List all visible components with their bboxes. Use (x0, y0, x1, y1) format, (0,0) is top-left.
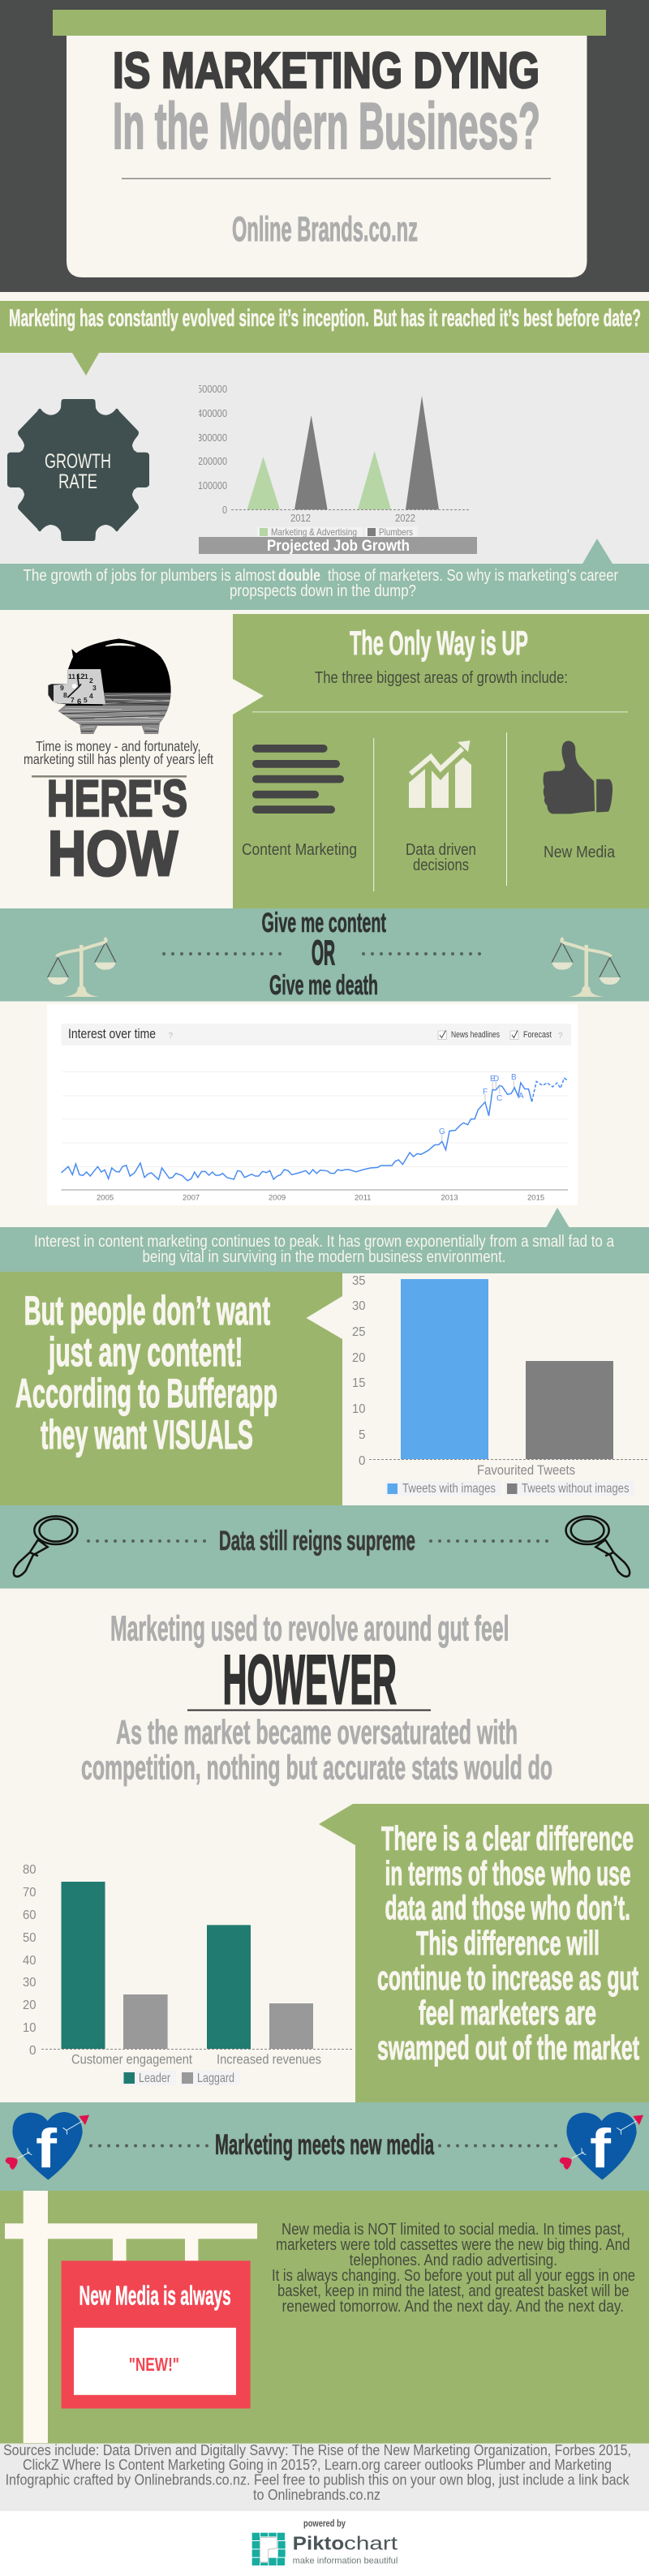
event markers: B (511, 1073, 517, 1082)
callout: plumbers vs marketers: double (278, 567, 320, 585)
icon: facebook heart left: f (36, 2118, 57, 2179)
section banner: marketing meets new media (0, 2102, 649, 2191)
sign board (62, 2260, 251, 2409)
category labels: Customer engagement (71, 2052, 192, 2067)
chart legend (257, 526, 418, 538)
legend: Tweets without images (522, 1482, 630, 1496)
callout: plumbers vs marketers: The growth of jobs for plumbers is almost (23, 567, 276, 585)
event markers: F (483, 1088, 488, 1097)
heading lines (261, 908, 386, 1001)
y axis labels: 80 (23, 1863, 37, 1877)
panel: people want visuals: just any content! (48, 1329, 243, 1375)
y axis labels (23, 1863, 37, 2058)
bars (62, 1882, 313, 2049)
y axis labels: 30 (352, 1299, 366, 1313)
icon: rising bar chart (409, 741, 471, 808)
subheading: The three biggest areas of growth include: (315, 669, 568, 687)
clock face numbers: 2 (89, 676, 93, 685)
heading lines: OR (312, 934, 335, 972)
chart: google trends interest over time (47, 1004, 578, 1205)
panel: title header (0, 0, 649, 292)
text block: however: HOWEVER (222, 1642, 397, 1719)
label: data driven decisions: Data driven (406, 841, 476, 859)
clock face numbers: 4 (89, 692, 93, 700)
clock face numbers: 6 (77, 698, 81, 706)
heading: here's how: HOW (48, 818, 178, 889)
triangle bars (247, 396, 439, 509)
y axis labels: 500000 (197, 383, 227, 395)
heading: here's how: HERE'S (47, 771, 187, 827)
panel: here's how (24, 633, 213, 889)
y axis labels: 10 (352, 1402, 366, 1416)
trend line (62, 1078, 568, 1181)
icon: magnifying glass left (14, 1516, 77, 1577)
footer: powered by piktochart: powered by (303, 2519, 346, 2529)
x axis years: 2011 (355, 1194, 371, 1202)
sign board: New Media is always (80, 2281, 231, 2311)
label: data driven decisions: decisions (413, 857, 469, 874)
chart header strip: Forecast (523, 1030, 552, 1040)
y axis labels: 50 (23, 1931, 37, 1945)
chart legend: Marketing & Advertising (271, 526, 357, 538)
y axis labels: 40 (23, 1954, 37, 1968)
bar: tweets without images (526, 1361, 613, 1459)
heading: here's how (47, 771, 187, 889)
event markers: G (439, 1127, 445, 1136)
callout: plumbers vs marketers (0, 564, 649, 610)
legend (385, 1481, 635, 1496)
piktochart wordmark: chart (344, 2532, 398, 2553)
panel: people want visuals: But people don’t want (24, 1288, 270, 1333)
clock face numbers: 5 (84, 696, 88, 704)
icon: thumbs up (543, 741, 612, 814)
panel: people want visuals: According to Bufferapp (15, 1371, 277, 1416)
y axis labels: 35 (352, 1274, 366, 1288)
x axis years: 2005 (97, 1194, 114, 1202)
callout pointer (582, 539, 612, 564)
x axis labels: 2022 (395, 512, 415, 524)
y axis labels: 0 (29, 2044, 37, 2058)
chart title bar: Projected Job Growth (267, 538, 410, 555)
clock face numbers: 3 (92, 684, 97, 692)
heading: Data still reigns supreme (219, 1526, 415, 1556)
y axis labels: 300000 (197, 431, 227, 444)
y axis labels: 30 (23, 1976, 37, 1990)
icon: gear with growth rate label: RATE (58, 470, 97, 493)
legend: Tweets with images (402, 1482, 496, 1496)
icon: piggy bank clock photo (48, 638, 171, 734)
piktochart wordmark (293, 2532, 398, 2566)
text block: new media description (272, 2221, 635, 2316)
sign board: "NEW!" (129, 2354, 179, 2375)
legend: Leader (139, 2072, 171, 2085)
y axis labels: 0 (222, 504, 227, 516)
icon: facebook heart left (6, 2112, 89, 2180)
green card cap (53, 10, 606, 36)
x axis years: 2013 (441, 1194, 458, 1202)
heading lines: Give me content (261, 908, 386, 938)
y axis labels: 20 (23, 1999, 37, 2012)
panel: new media (0, 2191, 649, 2444)
category labels: Increased revenues (217, 2052, 321, 2067)
chart header strip (62, 1024, 571, 1045)
brand name: Online Brands.co.nz (232, 210, 418, 249)
event markers: A (518, 1092, 524, 1101)
caption: time is money (24, 738, 213, 767)
y axis labels: 5 (359, 1428, 366, 1442)
y axis labels: 10 (23, 2021, 37, 2035)
y axis labels (352, 1274, 366, 1468)
label: data driven decisions (406, 841, 476, 874)
x axis labels (290, 512, 415, 524)
callout: content marketing interest: being vital in surviving in the modern business environment. (143, 1248, 506, 1266)
text block: however (81, 1609, 552, 1786)
title line 1: IS MARKETING DYING (113, 43, 539, 99)
event markers: D (493, 1075, 499, 1084)
intro banner (0, 301, 649, 353)
caption: time is money: Time is money - and fortunately, (36, 738, 201, 754)
caption: time is money: marketing still has plenty of years left (24, 751, 213, 767)
chart: leader vs laggard (23, 1863, 353, 2085)
chart legend: Plumbers (379, 526, 413, 538)
panel: people want visuals: they want VISUALS (41, 1412, 253, 1458)
y axis labels: 70 (23, 1886, 37, 1900)
panel: people want visuals (0, 1272, 342, 1505)
banner pointer (72, 353, 99, 376)
icon: gear with growth rate label: GROWTH (45, 450, 111, 473)
x axis label: Favourited Tweets (477, 1462, 575, 1478)
label: content marketing: Content Marketing (242, 841, 357, 859)
panel: clear difference (319, 1804, 649, 2102)
clock face numbers (60, 672, 97, 706)
clock face numbers: 7 (71, 696, 75, 704)
y axis labels: 25 (352, 1325, 366, 1339)
icon: scales left (48, 938, 116, 997)
icon: facebook heart right (560, 2112, 643, 2180)
title card (67, 36, 587, 277)
y axis labels: 400000 (197, 407, 227, 419)
event markers (439, 1073, 524, 1136)
chart: favourited tweets (352, 1274, 649, 1496)
x axis years: 2015 (527, 1194, 544, 1202)
y axis labels (197, 383, 227, 516)
section banner: data still reigns supreme (0, 1505, 649, 1589)
event markers: E (490, 1075, 496, 1084)
label: new media: New Media (544, 844, 616, 861)
footer: sources: to Onlinebrands.co.nz (253, 2487, 380, 2503)
icon: gear with growth rate label (7, 399, 149, 541)
icon: facebook heart right: f (590, 2118, 611, 2179)
x axis years: 2009 (269, 1194, 286, 1202)
y axis labels: 60 (23, 1908, 37, 1922)
icon: piktochart logo (252, 2533, 286, 2565)
chart header strip: News headlines (451, 1030, 500, 1040)
bar: tweets with images (401, 1279, 488, 1459)
panel: growth rate (0, 353, 649, 564)
clock face numbers: 11 (68, 672, 75, 680)
icon: magnifying glass right (566, 1516, 630, 1577)
piktochart wordmark: Pikto (293, 2532, 344, 2553)
section banner: give me content or give me death (0, 908, 649, 1002)
y axis labels: 200000 (198, 455, 227, 467)
clock face numbers: 12 (76, 672, 85, 681)
legend (122, 2071, 239, 2085)
piktochart wordmark: make information beautiful (293, 2557, 398, 2566)
chart header strip: ? (558, 1032, 563, 1041)
legend: Laggard (197, 2072, 234, 2085)
clock face numbers: 9 (60, 684, 64, 692)
callout: plumbers vs marketers: propspects down in the dump? (230, 582, 416, 600)
x axis years: 2007 (183, 1194, 200, 1202)
y axis labels: 20 (352, 1351, 366, 1365)
chart header strip: ? (169, 1032, 174, 1041)
footer: powered by piktochart (0, 2511, 649, 2576)
clock face numbers: 8 (63, 691, 67, 699)
clock face numbers: 1 (84, 672, 88, 680)
event markers: C (496, 1094, 502, 1103)
chart title bar (199, 537, 477, 555)
y axis labels: 100000 (198, 479, 227, 492)
chart header strip: Interest over time (68, 1026, 156, 1041)
x axis labels: 2012 (290, 512, 311, 524)
footer: sources (0, 2442, 649, 2511)
heading lines: Give me death (269, 970, 378, 1001)
icon: scales right (552, 938, 620, 997)
icon: text lines (252, 745, 344, 814)
x axis years (97, 1194, 544, 1202)
chart: projected job growth (197, 383, 477, 555)
y axis labels: 15 (352, 1376, 366, 1390)
text block: new media description: telephones. And radio advertising. (350, 2252, 557, 2269)
panel: the only way is up (233, 614, 649, 908)
callout: content marketing interest (0, 1208, 649, 1273)
y axis labels: 0 (359, 1454, 366, 1468)
heading: Marketing meets new media (215, 2129, 434, 2161)
sign post (5, 2191, 257, 2443)
category labels (71, 2052, 321, 2067)
